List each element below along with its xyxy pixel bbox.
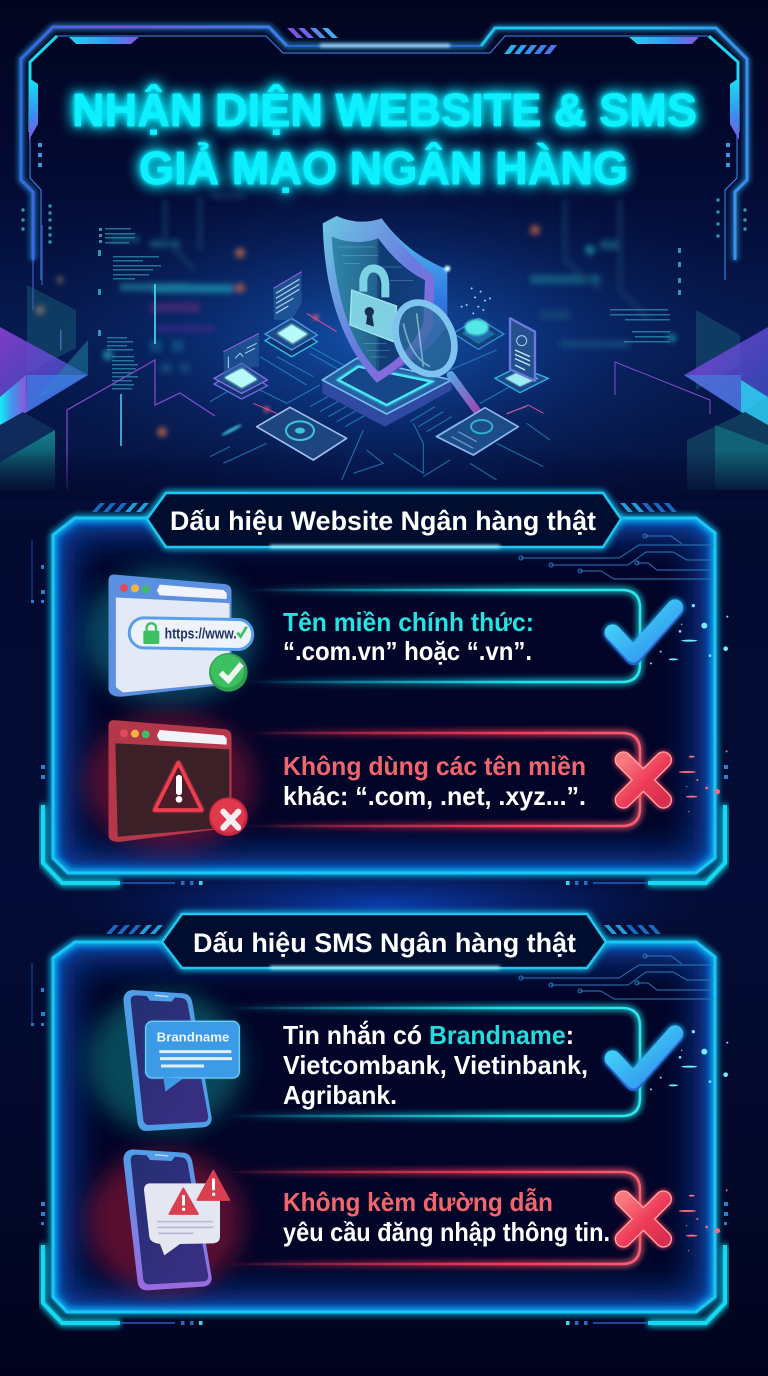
heading [147,493,621,548]
icon: check mark [613,1030,728,1090]
text: brandname [283,1020,588,1110]
row: real domain [85,567,728,703]
header stripes [106,925,661,934]
header stripes [92,503,677,512]
text: no links: Không kèm đường dẫn [283,1187,553,1217]
icon: check mark [613,604,728,664]
text: no links: yêu cầu đăng nhập thông tin. [283,1217,610,1247]
platform base [322,358,452,427]
background: right crystal shapes [684,310,768,490]
circuit traces [210,347,550,480]
text: real domain: Tên miền chính thức: [283,607,534,637]
panel frame [31,518,728,885]
hero bottom fade [0,450,768,500]
right tile with phone [495,318,548,393]
device bottom left [257,407,347,460]
panel frame [31,942,728,1325]
icon: phone with brandname bubble [123,990,239,1131]
text: real domain: “.com.vn” hoặc “.vn”. [283,636,532,666]
row: no links [87,1149,728,1292]
left tile with document [265,272,317,357]
row: other domains [85,714,728,850]
far left tile [214,333,267,399]
right tile [453,287,504,349]
title [72,84,697,194]
text: other domains [283,751,586,811]
background: left crystal shapes [0,285,88,490]
icon: warning browser [109,721,248,841]
text: brandname: Vietcombank, Vietinbank, [283,1050,588,1080]
hero illustration: shield, lock and magnifier on circuit [210,216,550,480]
icon: phone with warnings [123,1149,229,1290]
text: other domains: Không dùng các tên miền [283,751,586,781]
title: NHẬN DIỆN WEBSITE & SMS [72,84,697,136]
panel: SMS signs [31,914,728,1325]
heading: Dấu hiệu Website Ngân hàng thật [170,506,596,536]
icon: secure browser [109,575,253,696]
text: no links [283,1187,610,1247]
heading [162,914,606,969]
text: brandname: Tin nhắn có Brandname: [283,1020,574,1050]
heading: Dấu hiệu SMS Ngân hàng thật [193,928,576,958]
top frame [21,27,747,280]
icon: secure browser: https://www. [165,627,237,643]
shield [323,216,450,383]
background: blurred circuit texture [21,196,747,490]
icon: cross mark [623,1189,728,1251]
text: brandname: Agribank. [283,1080,397,1110]
magnifier [384,293,479,414]
text: real domain [283,607,534,666]
text: other domains: khác: “.com, .net, .xyz...”. [283,781,586,811]
panel: website signs [31,493,728,885]
row: brandname [87,990,728,1132]
padlock [350,268,397,342]
device bottom right [437,408,518,455]
title: GIẢ MẠO NGÂN HÀNG [139,142,628,194]
icon: phone with brandname bubble: Brandname [157,1030,229,1045]
icon: cross mark [623,750,728,812]
